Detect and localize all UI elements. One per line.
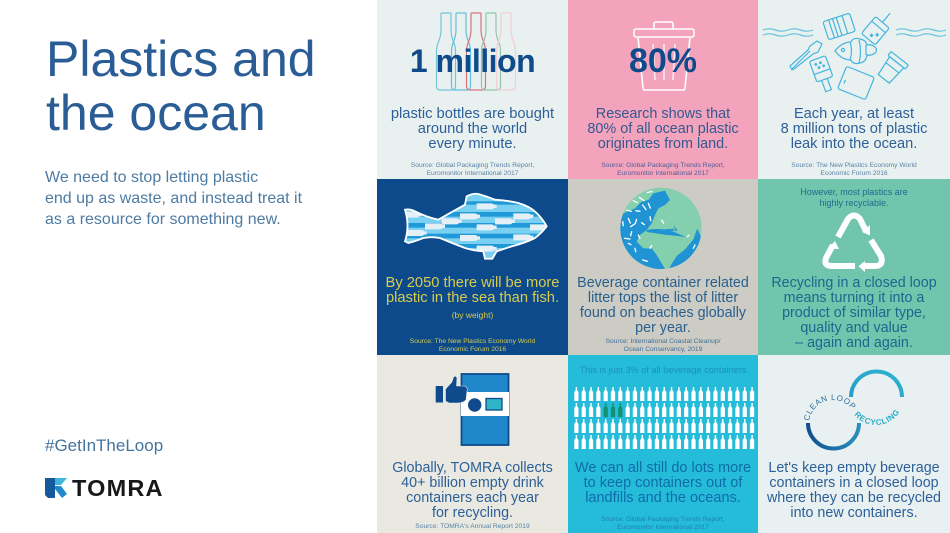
body text: where they can be recycled [767, 490, 941, 506]
title [46, 31, 316, 141]
icon: reverse vending machine with thumbs up [436, 373, 510, 446]
title: the ocean [46, 85, 266, 141]
body text: Beverage container related [577, 275, 749, 291]
big number: 80% [629, 42, 697, 80]
body text: containers each year [406, 490, 539, 506]
source: Source: International Coastal Cleanup/ [606, 338, 720, 345]
source: Source: Global Packaging Trends Report, [601, 516, 725, 523]
body text: 40+ billion empty drink [401, 475, 544, 491]
panel: 3 percent of containers [568, 355, 758, 533]
icon: fish made of bottles [404, 192, 548, 260]
TOMRA logo [45, 475, 164, 501]
intro text: end up as waste, and instead treat it [45, 190, 302, 207]
body text: We can all still do lots more [575, 460, 751, 476]
body text: per year. [635, 320, 691, 336]
panel: more plastic than fish [377, 179, 568, 355]
source: Economic Forum 2016 [820, 170, 888, 177]
body text [386, 275, 559, 306]
source [410, 338, 535, 353]
body text [391, 106, 554, 152]
body text: Recycling in a closed loop [771, 275, 937, 291]
body text: – again and again. [795, 335, 913, 351]
source: Source: The New Plastics Economy World [410, 338, 535, 345]
source: Source: TOMRA's Annual Report 2019 [415, 523, 530, 530]
body text: By 2050 there will be more [386, 275, 559, 291]
panel: 1 million bottles [377, 0, 568, 179]
source [601, 516, 725, 531]
icon: clean loop recycling logo: RECYCLING [854, 410, 899, 425]
body text: for recycling. [432, 505, 513, 521]
hashtag: #GetInTheLoop [45, 436, 163, 455]
body text: plastic bottles are bought [391, 106, 554, 122]
body text: quality and value [800, 320, 908, 336]
intro note: highly recyclable. [819, 198, 889, 208]
panel: 8 million tons [758, 0, 950, 179]
body text [587, 106, 739, 152]
source: Euromonitor International 2017 [427, 170, 518, 177]
chart: bottle grid [574, 387, 754, 449]
panel: recycling closed loop [758, 179, 950, 355]
icon: TOMRA mark [45, 478, 67, 498]
body text: Globally, TOMRA collects [392, 460, 553, 476]
body text: 8 million tons of plastic [781, 120, 927, 136]
icon: trash can [633, 21, 695, 91]
body text: Let's keep empty beverage [768, 460, 940, 476]
body text [577, 275, 749, 336]
intro text [45, 169, 302, 228]
intro note: However, most plastics are [800, 187, 908, 197]
source: Ocean Conservancy, 2019 [624, 346, 702, 353]
intro text: We need to stop letting plastic [45, 169, 258, 186]
body text [781, 106, 927, 152]
icon: recycling arrows [822, 212, 885, 272]
body text: into new containers. [790, 505, 918, 521]
source: Source: Global Packaging Trends Report, [411, 162, 534, 169]
body text [392, 460, 553, 521]
source: Source: Global Packaging Trends Report, [601, 162, 725, 169]
big number: 1 million [410, 43, 535, 79]
intro note [800, 187, 908, 208]
body text: to keep containers out of [584, 475, 742, 491]
body text: means turning it into a [784, 290, 924, 306]
icon: globe [620, 188, 702, 269]
intro text: as a resource for something new. [45, 211, 281, 228]
body text: every minute. [428, 136, 517, 152]
body text: Research shows that [596, 106, 730, 122]
body text: plastic in the sea than fish. [386, 290, 559, 306]
title: Plastics and [46, 31, 316, 87]
body text [767, 460, 941, 521]
body text: containers in a closed loop [769, 475, 939, 491]
body text [575, 460, 751, 506]
source [606, 338, 720, 353]
icon: five bottles [436, 12, 516, 91]
source [601, 162, 725, 177]
body text: originates from land. [598, 136, 728, 152]
source: Euromonitor International 2017 [617, 170, 709, 177]
icon: clean loop recycling logo: CLEAN LOOP [804, 394, 856, 420]
source: Source: The New Plastics Economy World [791, 162, 917, 169]
note: (by weight) [452, 310, 493, 320]
body text: product of similar type, [782, 305, 926, 321]
panel: 80 percent [568, 0, 758, 179]
body text: found on beaches globally [580, 305, 746, 321]
panel: clean loop recycling [758, 355, 950, 533]
body text: litter tops the list of litter [588, 290, 738, 306]
source [411, 162, 534, 177]
logo wordmark: TOMRA [72, 475, 164, 501]
body text: 80% of all ocean plastic [587, 120, 739, 136]
panel: beverage litter [568, 179, 758, 355]
icon: clean loop recycling logo [804, 370, 904, 450]
icon: plastic debris in the waves [762, 12, 946, 100]
source: Euromonitor International 2017 [617, 524, 709, 531]
source [791, 162, 917, 177]
body text [771, 275, 937, 351]
body text: Each year, at least [794, 106, 914, 122]
panel: TOMRA collects [377, 355, 568, 533]
body text: landfills and the oceans. [585, 490, 741, 506]
body text: around the world [418, 120, 527, 136]
body text: leak into the ocean. [791, 136, 917, 152]
source: Economic Forum 2016 [439, 346, 506, 353]
note: This is just 3% of all beverage containers [580, 365, 746, 375]
